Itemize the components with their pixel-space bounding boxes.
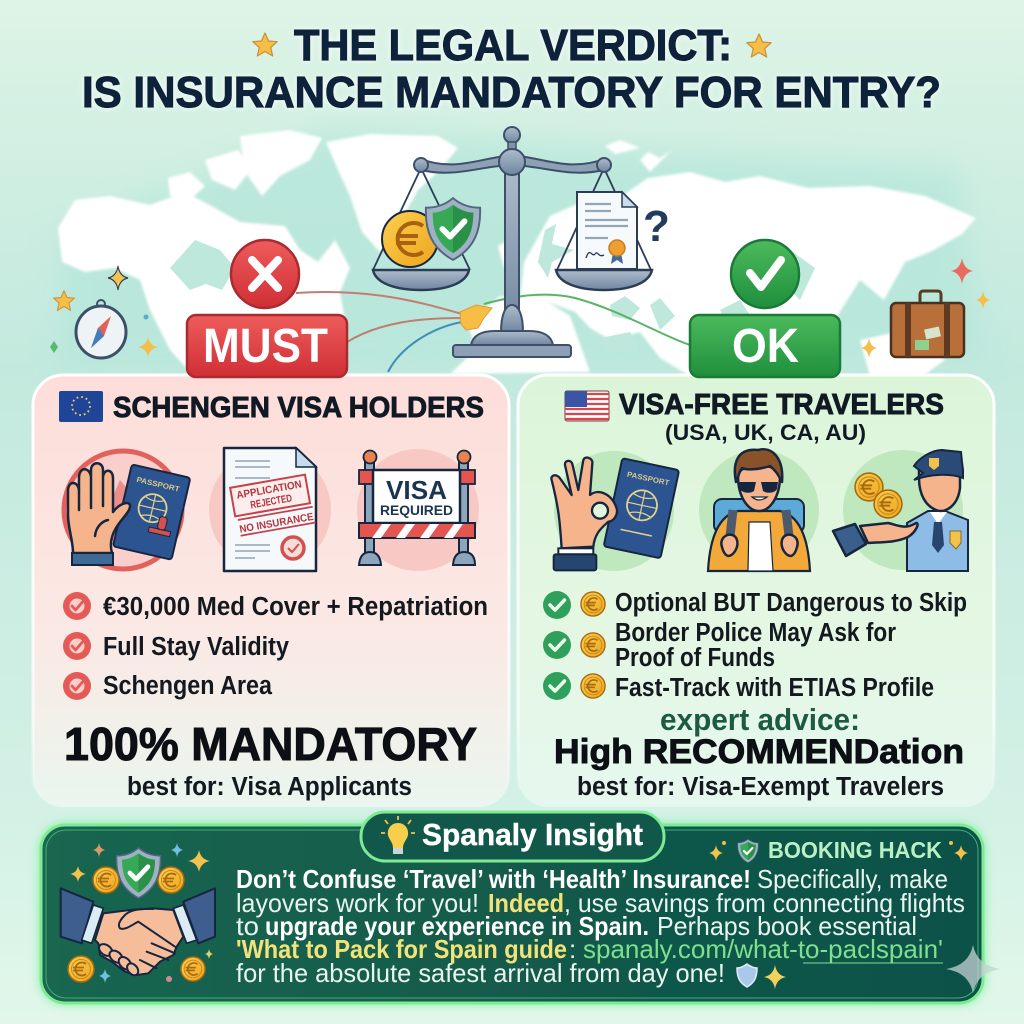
item: border police: Proof of Funds [615,644,775,672]
icon: US flag [565,391,609,421]
icon: visa required barrier: REQUIRED [380,503,453,518]
left pan [373,270,469,290]
item: border police: Border Police May Ask for [615,619,896,647]
line 3: to [236,911,259,941]
title line 1: THE LEGAL VERDICT: [294,21,732,70]
icon: rejected application: NO INSURANCE [239,511,314,536]
icon: rejected application: REJECTED [249,492,293,511]
icon: light bulb [381,816,415,854]
line 2: Indeed [488,888,564,918]
icon: suitcase [861,258,990,358]
line 2: , use savings from connecting flights [564,888,965,918]
checklist [63,592,488,700]
best for: best for: Visa Applicants [127,773,412,801]
heading: VISA-FREE TRAVELERS [619,389,944,421]
panel: Schengen visa holders [33,375,509,807]
item: med cover: €30,000 Med Cover + Repatriation [103,593,488,621]
item: schengen area: Schengen Area [103,672,273,700]
line 4: 'What to Pack for Spain guide [236,934,567,964]
heading pill [361,812,664,861]
recommendation: High RECOMMENDation [554,733,964,771]
icon: visa required barrier [357,449,479,571]
line 4 [236,934,943,964]
panel: visa-free travelers [518,375,994,807]
icon: handshake [61,843,215,983]
base [453,305,571,357]
connector lines [296,292,690,372]
icon: OK hand with passport: PASSPORT [626,470,671,487]
icon: balance scale [373,127,670,357]
icon: rejected application [209,448,331,571]
line 1: Don’t Confuse ‘Travel’ with ‘Health’ Insurance! [236,864,751,894]
decorative sparkle [946,945,1000,993]
icon: backpacker [699,449,819,571]
line 3: upgrade your experience in Spain. [265,911,649,941]
panel: Spanaly Insight [41,812,1000,1003]
icon: visa required barrier: VISA [386,475,447,505]
question mark: ? [643,202,670,251]
icon: star left [253,33,277,56]
best for: best for: Visa-Exempt Travelers [577,773,944,801]
item: optional: Optional BUT Dangerous to Skip [615,589,967,617]
hanging cords [373,168,651,270]
line 4: spanaly.com/what-to-paclspain' [583,934,943,964]
icon: stop hand with passport [64,451,190,569]
icon: OK hand with passport [551,451,679,571]
line 4: : [569,934,576,964]
icon: compass [50,266,158,358]
OK badge [690,240,840,377]
right pan [556,270,652,290]
heading pill: Spanaly Insight [422,817,643,852]
beam and column [414,127,611,335]
sub heading: (USA, UK, CA, AU) [665,420,866,445]
expert advice: expert advice: [660,702,860,737]
item: border police [543,619,896,672]
euro coin [382,211,438,267]
line 3: Perhaps book essential [657,911,917,941]
heading: SCHENGEN VISA HOLDERS [113,392,484,424]
title [82,21,941,117]
MUST button: MUST [203,320,328,373]
checklist [543,589,967,702]
MUST badge [187,240,347,377]
green check circle [731,240,799,308]
line 5: for the absolute safest arrival from day one! [236,958,725,988]
icon: rejected application: APPLICATION [236,478,303,502]
item: fast-track: Fast-Track with ETIAS Profile [615,674,934,702]
title line 2: IS INSURANCE MANDATORY FOR ENTRY? [82,68,941,117]
OK button [690,315,840,377]
line 2: layovers work for you! [236,888,479,918]
Spain marker [460,305,492,330]
OK button: OK [732,320,799,373]
icon: border officer with coins [833,450,968,571]
item: full stay: Full Stay Validity [103,633,290,661]
icon: star right [747,34,771,57]
line 3 [236,911,917,941]
line 2 [236,888,965,918]
verdict: 100% MANDATORY [64,718,477,770]
insight paragraph [236,864,965,989]
icon: stop hand with passport: PASSPORT [136,475,181,494]
shield with check [426,198,480,260]
line 1: Specifically, make [757,864,948,894]
icon: EU flag [59,391,103,422]
certificate document [577,192,637,269]
world map [58,130,985,378]
booking hack tag: BOOKING HACK [768,837,942,863]
red X circle [231,240,299,308]
